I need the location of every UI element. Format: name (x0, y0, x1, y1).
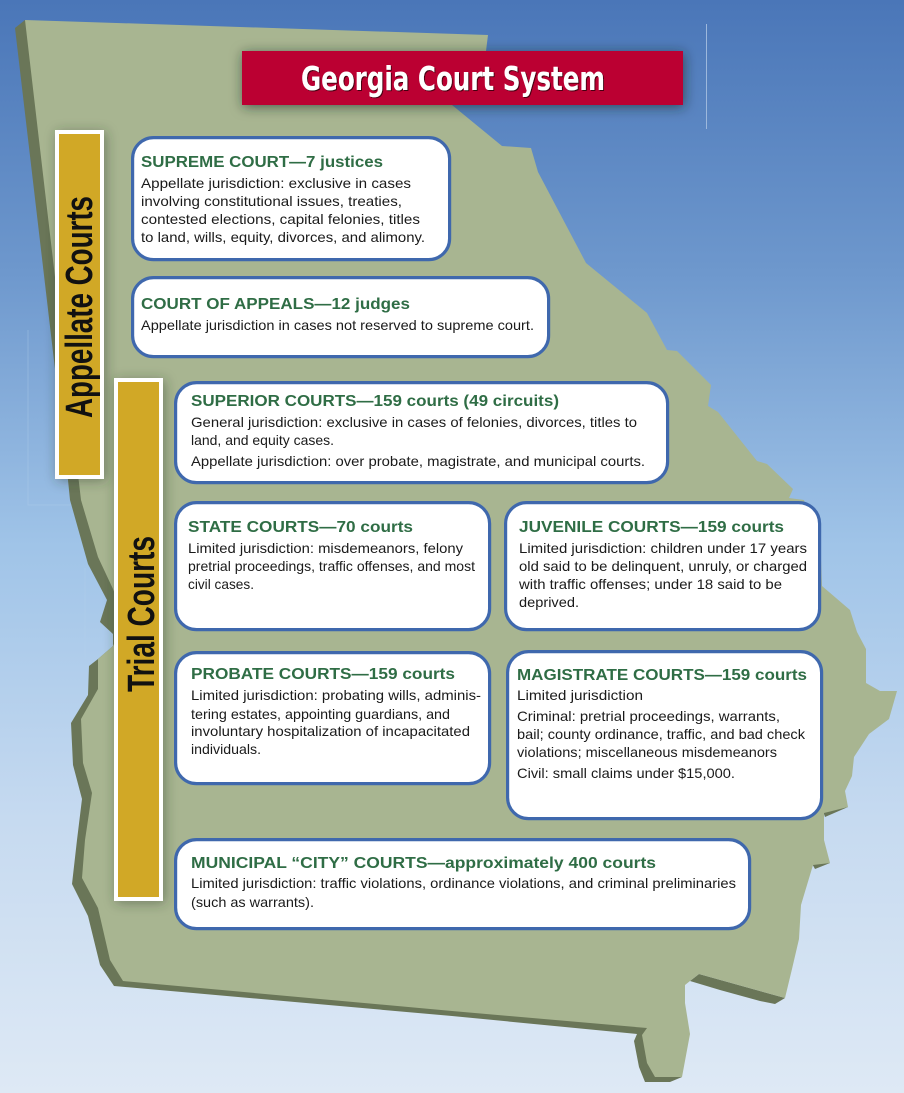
text: magistrate courts (517, 687, 806, 781)
title banner (242, 51, 683, 105)
text: probate courts: individuals. (191, 741, 261, 757)
panel: probate courts (176, 653, 490, 784)
text: superior courts: land, and equity cases. (191, 432, 334, 448)
panel: court of appeals (133, 278, 549, 357)
text: supreme court (141, 175, 425, 245)
text: juvenile courts (518, 540, 807, 610)
panel: superior courts (176, 383, 668, 483)
bar: trial courts (116, 380, 163, 899)
text: superior courts: Appellate jurisdiction: over probate, magistrate, and municipal courts. (191, 453, 645, 469)
text: probate courts: Limited jurisdiction: probating wills, adminis- (191, 687, 481, 703)
panel: state courts (176, 503, 490, 630)
text: supreme court: contested elections, capital felonies, titles (141, 211, 420, 227)
text: state courts: Limited jurisdiction: misdemeanors, felony (188, 540, 463, 556)
panel: supreme court (133, 138, 450, 260)
text: supreme court: involving constitutional issues, treaties, (141, 193, 402, 209)
text: municipal courts: (such as warrants). (191, 894, 314, 910)
text: probate courts: involuntary hospitalization of incapacitated (191, 723, 470, 739)
text: juvenile courts: old said to be delinquent, unruly, or charged (519, 558, 807, 574)
label: appellate courts: Appellate Courts (59, 196, 101, 418)
text: juvenile courts: deprived. (519, 594, 579, 610)
text: supreme court: to land, wills, equity, divorces, and alimony. (141, 229, 425, 245)
panel: juvenile courts (506, 503, 820, 630)
heading: juvenile courts: JUVENILE COURTS—159 courts (519, 519, 784, 536)
text: juvenile courts: Limited jurisdiction: children under 17 years (519, 540, 807, 556)
text: state courts (188, 540, 475, 592)
text: municipal courts: Limited jurisdiction: traffic violations, ordinance violations, and criminal preliminaries (191, 875, 736, 891)
heading: supreme court: SUPREME COURT—7 justices (141, 154, 383, 171)
text: state courts: civil cases. (188, 576, 254, 592)
text: state courts: pretrial proceedings, traffic offenses, and most (188, 558, 475, 574)
text: probate courts: tering estates, appointing guardians, and (191, 706, 450, 722)
text: magistrate courts: Criminal: pretrial proceedings, warrants, (517, 708, 780, 724)
text: probate courts (191, 687, 481, 757)
text: magistrate courts: Limited jurisdiction (517, 687, 643, 703)
text: court of appeals: Appellate jurisdiction in cases not reserved to supreme court. (141, 317, 534, 333)
text: supreme court: Appellate jurisdiction: exclusive in cases (141, 175, 411, 191)
heading: municipal courts: MUNICIPAL “CITY” COURTS—approximately 400 courts (191, 855, 656, 872)
heading: probate courts: PROBATE COURTS—159 courts (191, 666, 455, 683)
panel: magistrate courts (508, 652, 822, 819)
text: magistrate courts: Civil: small claims under $15,000. (517, 765, 735, 781)
heading: state courts: STATE COURTS—70 courts (188, 519, 413, 536)
text: municipal courts (191, 875, 736, 910)
bar: appellate courts (57, 132, 102, 477)
heading: superior courts: SUPERIOR COURTS—159 courts (49 circuits) (191, 393, 559, 410)
text: magistrate courts: violations; miscellaneous misdemeanors (517, 744, 777, 760)
text: superior courts: General jurisdiction: exclusive in cases of felonies, divorces, titles to (191, 414, 637, 430)
text: superior courts (191, 414, 645, 469)
text: magistrate courts: bail; county ordinance, traffic, and bad check (517, 726, 806, 742)
heading: court of appeals: COURT OF APPEALS—12 judges (141, 296, 410, 313)
label: trial courts: Trial Courts (121, 536, 163, 692)
title: Georgia Court System (301, 59, 605, 98)
heading: magistrate courts: MAGISTRATE COURTS—159 courts (517, 667, 807, 684)
text: juvenile courts: with traffic offenses; under 18 said to be (518, 576, 782, 592)
panel: municipal courts (176, 840, 750, 929)
